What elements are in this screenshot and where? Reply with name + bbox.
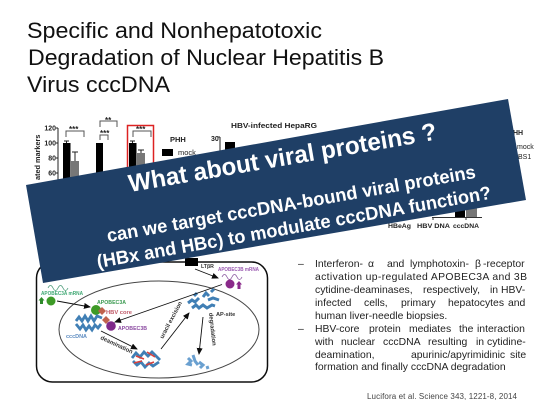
HBV core: HBV core <box>106 310 132 316</box>
text block: findings: and <box>508 298 526 309</box>
text block: findings <box>298 259 527 373</box>
text block: findings: in <box>476 337 484 348</box>
label: deamination: deamination <box>99 335 134 356</box>
bar chart: middle panel: 30 <box>211 136 219 143</box>
text block: findings: with <box>314 337 334 348</box>
text block: findings: human liver-needle biopsies. <box>315 311 447 322</box>
APOBEC3A mRNA group: APOBEC3A <box>97 300 126 306</box>
icon: cccDNA strand: cccDNA <box>66 334 88 340</box>
panel: mechanism diagram <box>36 258 268 382</box>
bar chart: left panel <box>33 116 196 183</box>
APOBEC3B mRNA group <box>218 267 259 289</box>
bar chart: left panel: ated markers <box>33 135 42 180</box>
text block: findings: -receptor <box>483 259 525 270</box>
title: Virus cccDNA <box>27 72 170 97</box>
icon: cccDNA strand <box>66 316 102 340</box>
label: uracil excision: uracil excision <box>159 301 184 340</box>
text block: findings: cells, <box>364 298 388 309</box>
text block: findings: cccDNA <box>383 337 421 348</box>
bar chart: right panel: HBV DNA <box>417 223 450 230</box>
text block: findings: formation and finally cccDNA degradation <box>315 362 506 373</box>
bar chart: right panel: cccDNA <box>453 223 479 230</box>
text block: findings: deamination, <box>315 350 374 361</box>
text block: findings: the <box>459 324 474 335</box>
bar chart: left panel: *** <box>100 129 110 138</box>
title <box>27 18 384 97</box>
banner question line 2: (HBx and HBc) to modulate cccDNA function? <box>95 182 493 272</box>
text block: findings: apurinic/apyrimidinic <box>411 350 505 361</box>
APOBEC3A mRNA group <box>38 286 126 315</box>
bar chart: left panel: ** <box>105 116 112 125</box>
arrows <box>57 269 222 354</box>
text block: findings: – <box>298 259 304 270</box>
text block: findings: interaction <box>477 324 525 335</box>
APOBEC3B mRNA group: APOBEC3B mRNA <box>218 267 259 273</box>
banner question line 1: can we target cccDNA-bound viral proteins <box>105 161 477 246</box>
icon: deaminated strand <box>132 352 160 367</box>
text block: findings: lymphotoxin- <box>410 259 469 270</box>
text block: findings: activation up-regulated APOBEC3A and 3B <box>315 272 527 283</box>
text block: findings: β <box>475 259 481 270</box>
text block: findings: α <box>368 259 374 270</box>
title: Specific and Nonhepatotoxic <box>27 18 322 43</box>
bar chart: middle panel: HBV-infected HepaRG <box>231 121 317 130</box>
HBV core <box>98 307 132 324</box>
bar chart: right panel: HH <box>513 130 523 137</box>
text block: findings: and <box>387 259 405 270</box>
bar chart: middle panel <box>211 121 317 165</box>
APOBEC3B <box>106 321 147 332</box>
APOBEC3A mRNA group: APOBEC3A mRNA <box>41 291 83 297</box>
bar chart: left panel: PHH <box>170 135 186 144</box>
text block: findings: respectively, <box>423 285 480 296</box>
text block: findings: in HBV- <box>490 285 525 296</box>
bar chart: right panel: HBeAg <box>388 223 411 230</box>
text block: findings: hepatocytes <box>448 298 504 309</box>
bar chart: right panel: mock <box>517 144 534 151</box>
title: Degradation of Nuclear Hepatitis B <box>28 45 384 70</box>
label: LTbR: LTβR <box>201 264 214 270</box>
label: degradation: degradation <box>207 313 216 346</box>
bar chart: left panel: *** <box>136 125 146 134</box>
text block: findings: mediates <box>409 324 451 335</box>
text block: findings: site <box>510 350 526 361</box>
bar chart: left panel: mock <box>178 148 196 157</box>
bar chart: right panel <box>388 130 534 230</box>
text block: findings: nuclear <box>341 337 376 348</box>
banner heading: What about viral proteins ? <box>126 119 439 198</box>
icon: receptor LTbR <box>185 258 198 266</box>
icon: AP-site strand <box>188 289 219 308</box>
text block: findings: resulting <box>428 337 467 348</box>
text block: findings: cytidine-deaminases, <box>315 285 413 296</box>
bar chart: right panel: BS1 <box>518 154 531 161</box>
bar chart: left panel: 60 <box>48 170 56 178</box>
bar chart: left panel: *** <box>69 125 79 134</box>
bar chart: left panel: 100 <box>44 140 56 148</box>
icon: degraded DNA <box>188 355 208 369</box>
citation: Lucifora et al. Science 343, 1221-8, 2014 <box>367 392 518 401</box>
text block: findings: infected <box>315 298 352 309</box>
text block: findings: cytidine- <box>487 337 526 348</box>
text block: findings: Interferon- <box>315 259 363 270</box>
bar chart: left panel: 120 <box>44 126 56 132</box>
label: AP-site: AP-site <box>216 312 235 318</box>
text block: findings: primary <box>401 298 436 309</box>
text block: findings: HBV-core <box>315 324 360 335</box>
bar chart: left panel: 80 <box>48 156 56 162</box>
text block: findings: – <box>298 324 304 335</box>
APOBEC3B: APOBEC3B <box>118 326 147 332</box>
banner <box>26 99 526 283</box>
red deamination marks <box>134 352 155 365</box>
text block: findings: protein <box>369 324 401 335</box>
